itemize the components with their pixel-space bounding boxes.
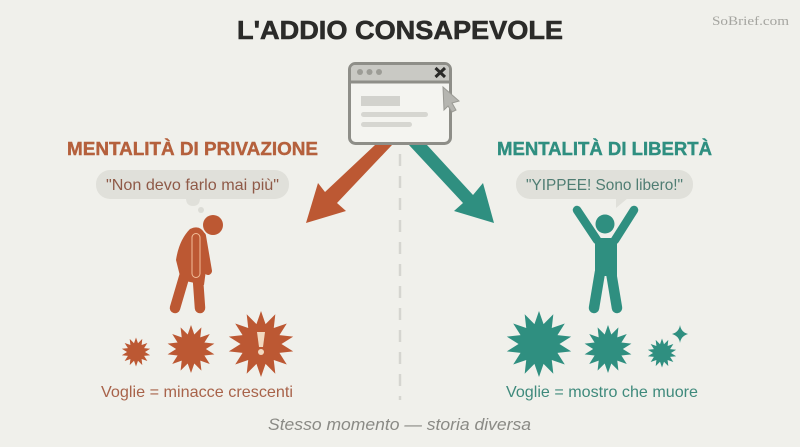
title: L'ADDIO CONSAPEVOLE xyxy=(237,15,563,45)
icon: small craving burst xyxy=(122,338,150,366)
arrow: right to freedom xyxy=(409,145,494,223)
speech bubble: right: "YIPPEE! Sono libero!" xyxy=(526,177,683,194)
icon: medium fading burst xyxy=(585,325,631,373)
thought bubble: left xyxy=(96,170,289,213)
icon: slumped figure xyxy=(175,215,223,308)
heading: freedom mindset: MENTALITÀ DI LIBERTÀ xyxy=(497,138,712,159)
icon: small fading burst xyxy=(648,338,676,368)
arrow: left to deprivation xyxy=(306,145,392,223)
icon: medium craving burst xyxy=(168,325,214,373)
icon: large fading burst xyxy=(507,311,571,377)
icon: large craving burst with alert xyxy=(229,311,293,377)
watermark: SoBrief.com xyxy=(712,13,789,28)
heading: deprivation mindset: MENTALITÀ DI PRIVAZIONE xyxy=(67,138,318,159)
speech bubble: right xyxy=(516,170,693,208)
caption: left: Voglie = minacce crescenti xyxy=(101,384,293,401)
caption: right: Voglie = mostro che muore xyxy=(506,384,698,401)
center dashed divider xyxy=(399,154,401,400)
thought bubble: left: "Non devo farlo mai più" xyxy=(106,177,279,194)
footer caption: Stesso momento — storia diversa xyxy=(268,415,531,434)
icon: browser window xyxy=(350,64,459,144)
icon: cheering figure xyxy=(577,210,634,308)
icon: sparkle xyxy=(672,325,688,343)
